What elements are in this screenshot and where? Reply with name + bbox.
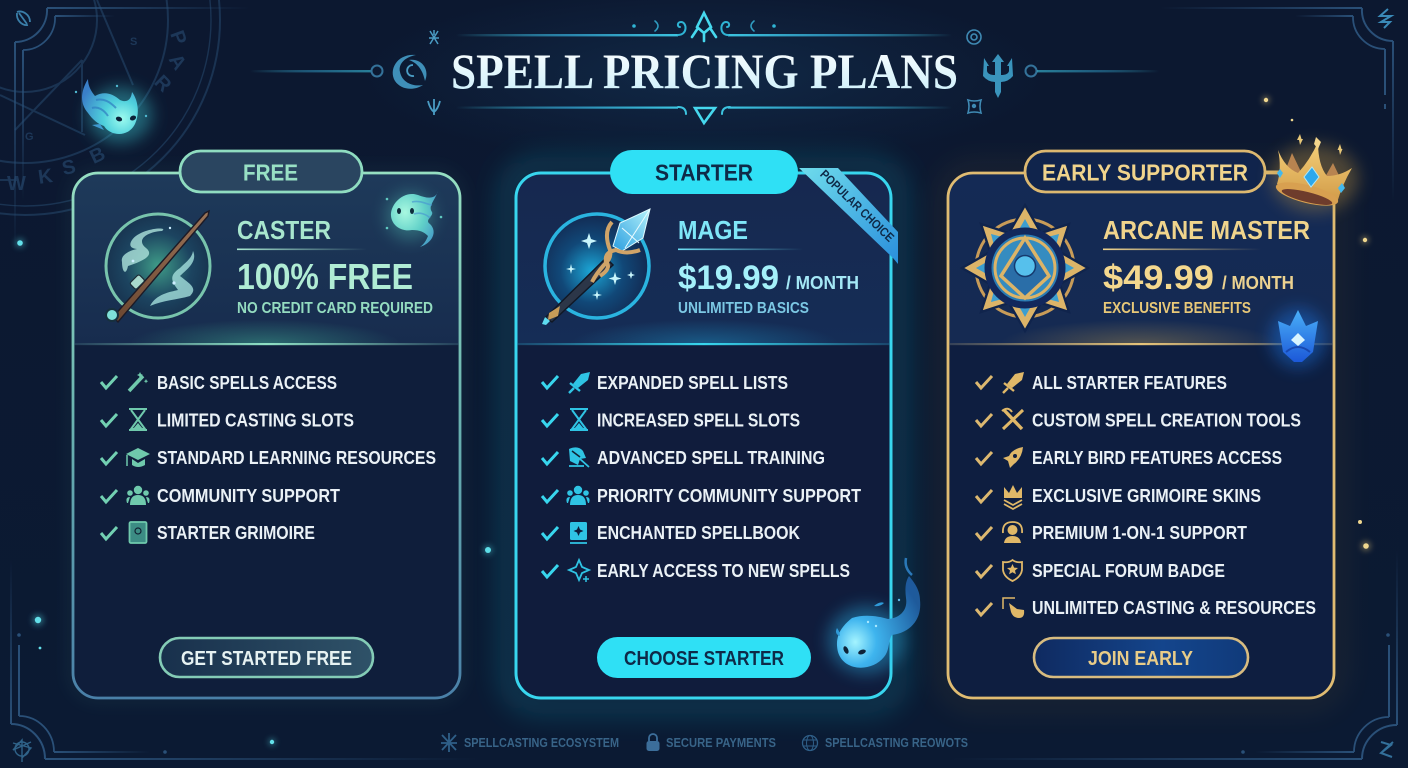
footer item: secure payments: SECURE PAYMENTS bbox=[666, 735, 776, 750]
feature: early bird features access: EARLY BIRD FEATURES ACCESS bbox=[1032, 448, 1282, 468]
icon: crown bbox=[1271, 134, 1359, 212]
badge: early supporter: EARLY SUPPORTER bbox=[1042, 160, 1248, 186]
spirit: fire wisp bbox=[828, 558, 920, 674]
footer item: spellcasting reowots: SPELLCASTING REOWOTS bbox=[825, 735, 968, 750]
magic circle decoration: K bbox=[37, 165, 55, 189]
feature: early bird features access bbox=[976, 447, 1282, 468]
plan name: arcane master: ARCANE MASTER bbox=[1103, 215, 1310, 245]
feature: standard learning resources: STANDARD LEARNING RESOURCES bbox=[157, 448, 436, 468]
magic circle decoration bbox=[0, 0, 220, 215]
icon: arcane medallion bbox=[962, 205, 1088, 331]
magic circle decoration: W bbox=[7, 173, 26, 195]
title side ornament: right line bbox=[1026, 66, 1159, 76]
icon: trident bbox=[983, 54, 1013, 98]
magic circle decoration: B bbox=[86, 143, 109, 169]
magic circle decoration: G bbox=[25, 131, 34, 143]
badge: starter bbox=[610, 150, 798, 194]
feature: special forum badge: SPECIAL FORUM BADGE bbox=[1032, 561, 1225, 581]
feature: unlimited casting and resources: UNLIMITED CASTING & RESOURCES bbox=[1032, 598, 1316, 618]
feature: starter grimoire: STARTER GRIMOIRE bbox=[157, 523, 315, 543]
corner rune: bottom left bbox=[13, 740, 31, 762]
icon: wand and swirls bbox=[106, 211, 210, 322]
feature: community support: COMMUNITY SUPPORT bbox=[157, 486, 340, 506]
button: join early: JOIN EARLY bbox=[1088, 648, 1194, 670]
panel: early supporter plan bbox=[945, 134, 1359, 702]
subtext: no credit card: NO CREDIT CARD REQUIRED bbox=[237, 300, 433, 317]
feature: premium 1-on-1 support bbox=[976, 522, 1247, 543]
feature list: early supporter bbox=[976, 372, 1316, 618]
price: 49.99 per month: $49.99 bbox=[1103, 259, 1214, 297]
price: 19.99 per month: $19.99 bbox=[678, 259, 779, 297]
feature: limited casting slots bbox=[101, 409, 354, 430]
icon: concentric circle rune bbox=[967, 30, 981, 44]
title ornament: top bbox=[456, 13, 952, 41]
magic circle decoration: P bbox=[165, 28, 191, 48]
magic circle decoration: A bbox=[164, 50, 190, 74]
icon: crystal staff bbox=[542, 209, 650, 325]
panel: free plan bbox=[72, 151, 461, 699]
feature: increased spell slots: INCREASED SPELL SLOTS bbox=[597, 410, 800, 430]
feature list: starter bbox=[542, 372, 861, 582]
corner rune: top right bbox=[1380, 9, 1391, 28]
feature: enchanted spellbook: ENCHANTED SPELLBOOK bbox=[597, 523, 800, 543]
icon: rune bottom left bbox=[428, 99, 440, 115]
ribbon: popular choice: POPULAR CHOICE bbox=[817, 167, 897, 245]
feature: expanded spell lists bbox=[542, 372, 788, 393]
feature: all starter features: ALL STARTER FEATURES bbox=[1032, 373, 1227, 393]
plan name: caster: CASTER bbox=[237, 215, 331, 245]
button: get started free bbox=[160, 638, 373, 677]
corner rune: top left bbox=[17, 11, 30, 25]
footer item: secure payments bbox=[646, 734, 776, 751]
subtext: exclusive benefits: EXCLUSIVE BENEFITS bbox=[1103, 300, 1251, 317]
spirit: card bbox=[386, 191, 442, 247]
plan name: mage: MAGE bbox=[678, 215, 748, 245]
footer item: spellcasting ecosystem: SPELLCASTING ECOSYSTEM bbox=[464, 735, 619, 750]
feature: priority community support: PRIORITY COMMUNITY SUPPORT bbox=[597, 486, 861, 506]
spirit: top left bbox=[75, 79, 152, 143]
price: 19.99 per month bbox=[678, 259, 859, 297]
badge: free: FREE bbox=[243, 160, 298, 186]
ribbon: popular choice bbox=[799, 167, 898, 264]
badge: starter: STARTER bbox=[655, 160, 753, 186]
icon: crescent moon bbox=[393, 55, 427, 89]
panel: starter plan bbox=[508, 150, 920, 706]
icon: rune top left bbox=[429, 30, 439, 44]
feature: custom spell creation tools: CUSTOM SPELL CREATION TOOLS bbox=[1032, 410, 1301, 430]
button: get started free: GET STARTED FREE bbox=[181, 648, 352, 670]
price: 19.99 per month: / MONTH bbox=[786, 272, 859, 293]
button: choose starter bbox=[597, 637, 811, 678]
title: SPELL PRICING PLANS bbox=[451, 43, 958, 99]
title side ornament: left line bbox=[250, 66, 382, 76]
feature: increased spell slots bbox=[542, 409, 800, 430]
feature: enchanted spellbook bbox=[542, 522, 800, 543]
feature: early access to new spells: EARLY ACCESS TO NEW SPELLS bbox=[597, 561, 850, 581]
feature: premium 1-on-1 support: PREMIUM 1-ON-1 SUPPORT bbox=[1032, 523, 1247, 543]
magic circle decoration: R bbox=[150, 71, 176, 97]
subtext: unlimited basics: UNLIMITED BASICS bbox=[678, 300, 809, 317]
feature: basic spells access bbox=[101, 372, 337, 393]
magic circle decoration: S bbox=[130, 36, 137, 48]
magic circle decoration: S bbox=[60, 156, 78, 180]
title ornament: bottom bbox=[456, 106, 952, 123]
badge: free bbox=[180, 151, 362, 192]
price: 100% free: 100% FREE bbox=[237, 256, 413, 297]
feature: special forum badge bbox=[976, 560, 1225, 581]
button: join early bbox=[1034, 638, 1248, 677]
price: 49.99 per month: / MONTH bbox=[1222, 272, 1294, 293]
footer item: spellcasting ecosystem bbox=[441, 733, 619, 752]
feature: advanced spell training: ADVANCED SPELL TRAINING bbox=[597, 448, 825, 468]
button: choose starter: CHOOSE STARTER bbox=[624, 648, 784, 670]
icon: square rune bbox=[968, 100, 981, 113]
footer bbox=[441, 733, 968, 752]
feature: early access to new spells bbox=[542, 560, 850, 582]
price: 49.99 per month bbox=[1103, 259, 1294, 297]
feature: exclusive grimoire skins: EXCLUSIVE GRIMOIRE SKINS bbox=[1032, 486, 1261, 506]
badge: early supporter bbox=[1025, 151, 1282, 192]
feature: custom spell creation tools bbox=[976, 409, 1301, 430]
feature: limited casting slots: LIMITED CASTING SLOTS bbox=[157, 410, 354, 430]
feature: all starter features bbox=[976, 372, 1227, 393]
corner rune: bottom right bbox=[1381, 742, 1393, 757]
feature: exclusive grimoire skins bbox=[976, 485, 1261, 509]
icon: blue crown bbox=[1270, 308, 1326, 368]
feature list: free bbox=[101, 372, 436, 543]
feature: starter grimoire bbox=[101, 522, 315, 543]
feature: expanded spell lists: EXPANDED SPELL LISTS bbox=[597, 373, 788, 393]
feature: basic spells access: BASIC SPELLS ACCESS bbox=[157, 373, 337, 393]
